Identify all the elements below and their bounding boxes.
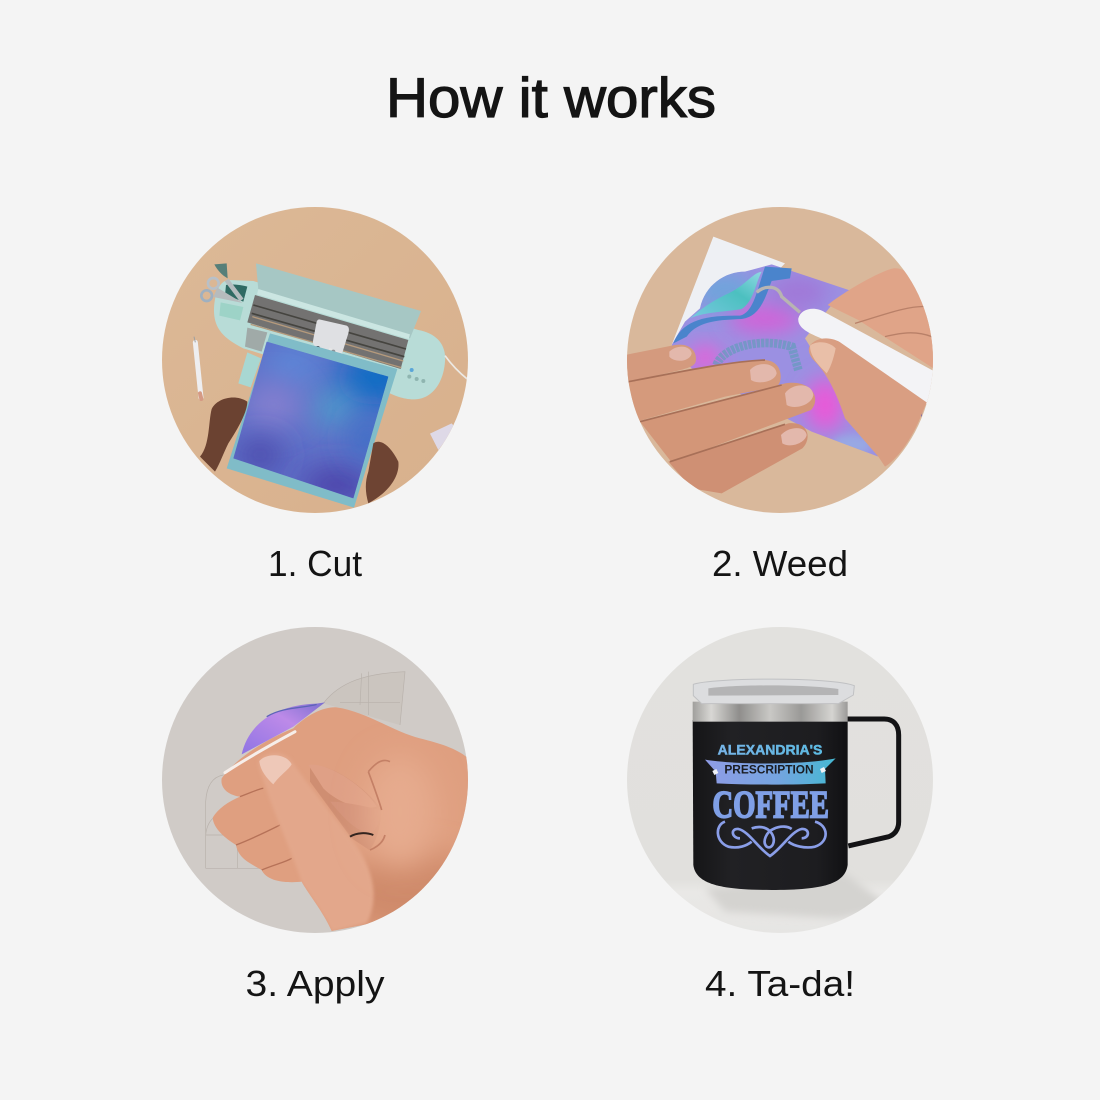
holographic vinyl bbox=[668, 262, 885, 462]
transfer tape grid bbox=[206, 672, 405, 868]
cutting mat bbox=[227, 333, 397, 508]
panel: step 4 ta-da bbox=[625, 625, 935, 935]
weeding tool on table bbox=[195, 342, 201, 398]
backdrop bbox=[625, 625, 935, 935]
decal banner text: PRESCRIPTION bbox=[724, 762, 814, 776]
thumb bbox=[258, 753, 374, 931]
peeling curl bbox=[673, 267, 792, 343]
film highlight bbox=[225, 732, 295, 773]
right hand fingers bbox=[828, 268, 933, 368]
cutting head bbox=[313, 319, 349, 355]
tool pocket bbox=[225, 284, 247, 302]
panel: step 3 apply bbox=[160, 625, 487, 935]
finger nails bbox=[669, 347, 692, 361]
decal coffee: COFFEE bbox=[712, 783, 829, 827]
panel: step 2 weed bbox=[625, 205, 935, 515]
holographic vinyl sheet bbox=[234, 342, 388, 498]
white pen bbox=[798, 309, 935, 405]
machine lid bbox=[256, 263, 421, 338]
panel: step 1 cut bbox=[160, 205, 470, 515]
lower vinyl corner at pen bbox=[921, 412, 922, 416]
banner diamonds bbox=[712, 769, 718, 775]
label: step 4: 4. Ta-da! bbox=[705, 963, 855, 1004]
finger gaps bbox=[236, 788, 292, 870]
cutting machine bbox=[201, 263, 445, 399]
purple vinyl bbox=[242, 702, 325, 754]
teal speckled ring bbox=[717, 343, 798, 370]
fingers shade bbox=[310, 768, 370, 850]
mug handle bbox=[847, 719, 899, 846]
decal name: ALEXANDRIA'S bbox=[718, 741, 822, 757]
mug shadow bbox=[705, 873, 892, 918]
white backing sheet bbox=[672, 237, 785, 345]
hand lower shading bbox=[361, 849, 452, 926]
label: step 3: 3. Apply bbox=[246, 963, 384, 1004]
hands bbox=[200, 397, 247, 472]
left hand fingers bbox=[625, 345, 696, 383]
wooden table background bbox=[160, 205, 470, 515]
palm highlight bbox=[363, 755, 437, 868]
finger knuckle creases bbox=[628, 360, 785, 462]
thumb nail bbox=[259, 755, 292, 784]
label: step 1: 1. Cut bbox=[268, 543, 362, 584]
weeder tool in pocket bbox=[227, 280, 242, 300]
thumb bbox=[809, 338, 927, 467]
paper scrap bbox=[430, 423, 455, 450]
hand creases bbox=[368, 760, 390, 850]
buttons bbox=[410, 368, 414, 372]
clear lid bbox=[693, 679, 854, 704]
weeding hook bbox=[757, 287, 800, 312]
steel rim bbox=[693, 702, 848, 722]
label: step 2: 2. Weed bbox=[712, 543, 848, 584]
decal banner bbox=[705, 758, 836, 785]
table bbox=[625, 205, 935, 515]
cable bbox=[445, 356, 468, 380]
decal flourish bbox=[718, 822, 826, 856]
dark gap bbox=[350, 833, 373, 837]
scissors bbox=[208, 278, 219, 289]
wall background bbox=[160, 625, 470, 935]
mat guide bbox=[238, 352, 261, 387]
mug body bbox=[693, 720, 848, 890]
hand bbox=[212, 707, 468, 931]
title: How it works bbox=[386, 66, 716, 129]
mug decal bbox=[705, 741, 836, 856]
